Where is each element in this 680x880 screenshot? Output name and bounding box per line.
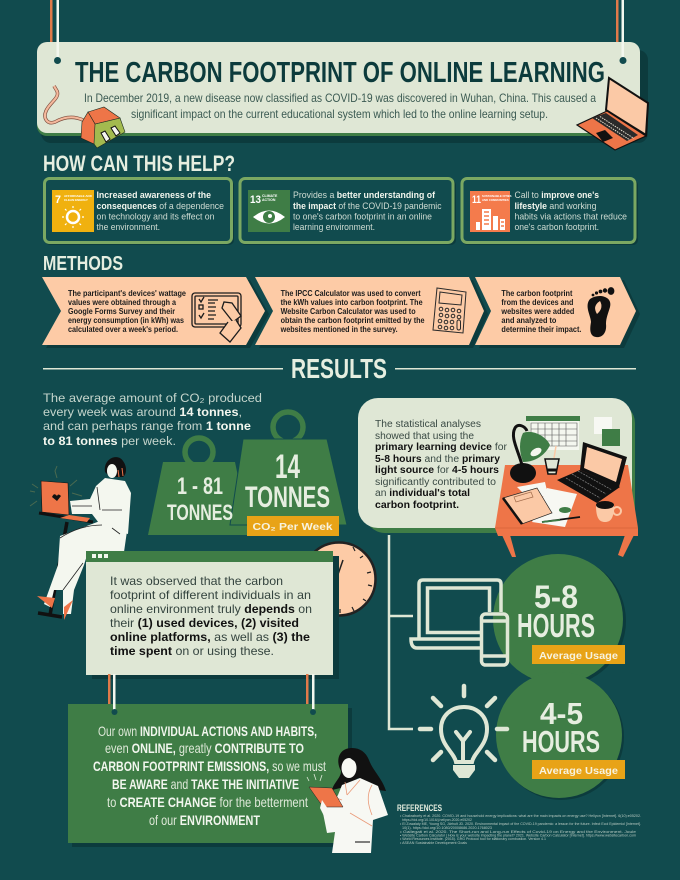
lamp [510,425,550,483]
references: REFERENCES [397,803,442,813]
illustration: person with laptop [30,457,131,620]
reference list: • Chakraborty et al. 2020. COVID-19 and household energy implications: what are the main impacts on energy use? Heliyon [Internet]. 6(10):e05202. [400,814,641,818]
desk top [495,465,638,557]
card 2 text: learning environment. [293,222,375,232]
icon: small weight body [148,438,250,535]
intro text: significant impact on the current educational system which led to the online learning setup. [131,107,548,121]
card 2 text: to one's carbon footprint in an online [293,212,432,222]
reference list: • World Resources Institute. (2015). GHG Protocol tool for stationary combustion. Version 4.1 [400,837,546,841]
icon: SDG 7 [52,190,94,232]
arrow: method step 2 [255,277,488,348]
observation text: footprint of different individuals in an [110,588,311,602]
reference list: • Gallegati et al. 2020. The Short-run and Long-run Effects of Covid-19 on Energy and the Environment. Joule [400,830,636,834]
method 3 text: websites were added [500,307,575,316]
illustration: woman with tablet [307,748,388,853]
card 3 text: lifestyle and working [514,201,596,211]
reference list: • Website Carbon Calculator | How is your website impacting the planet? 2021. Website Carbon Calculator [Internet]. https://www.websitecarbon.com [400,834,636,838]
desk laptop [557,442,627,503]
conclusion text [93,723,326,828]
intro text [84,91,596,121]
label: average usage: Average Usage [539,650,618,662]
text: average CO2: and can perhaps range from 1 tonne [43,419,251,433]
analyses text: significantly contributed to [375,477,497,488]
observation text [110,574,312,658]
heading: methods: METHODS [43,253,123,275]
icon: SDG 7: CLEAN ENERGY [64,198,88,202]
method 2 text: The IPCC Calculator was used to convert [281,289,421,298]
analyses text: showed that using the [375,431,475,442]
reference list: 10(1). https://doi.org/10.1080/20008686.2020.1768023 [402,826,492,830]
illustration: desk [495,416,638,557]
panel: conclusion [68,674,352,847]
intro text: In December 2019, a new disease now classified as COVID-19 was discovered in Wuhan, China. This caused a [84,91,596,105]
icon: plug [45,86,125,148]
card 1 text [96,190,224,232]
connector lines [389,535,413,729]
panel: observation [86,551,339,679]
method 1 text: energy consumption (in kWh) was [68,316,185,325]
method 2 text: obtain the carbon footprint emitted by the [281,316,425,325]
icon: big weight 14 tonnes [230,412,347,536]
mug [596,501,621,522]
card 2 text: Provides a better understanding of [293,190,436,200]
card 1 text: the environment. [96,222,160,232]
icon: SDG 7: AFFORDABLE AND [64,194,93,198]
icon: laptop and phone [411,580,508,665]
method 2 text [280,289,425,334]
observation text: their (1) used devices, (2) visited [110,616,299,630]
icon: checklist [192,293,241,342]
card 3 text: habits via actions that reduce [514,212,627,222]
analyses text: carbon footprint. [375,500,459,511]
circle: 4-5 hours: HOURS [522,724,600,759]
analyses text [375,419,508,511]
method 1 text [68,289,187,334]
conclusion text: CARBON FOOTPRINT EMISSIONS, so we must [93,758,326,774]
arrow: method step 3 [475,277,640,348]
circle: 5-8 hours [493,554,626,686]
icon: big weight 14 tonnes: 14 [275,448,300,486]
small weight label: TONNES [167,500,233,525]
method 3 text: The carbon footprint [501,289,573,298]
arrow: method step 1 [42,277,269,348]
calendar [526,416,580,450]
method 1 text: calculated over a week's period. [68,325,178,334]
circle: 5-8 hours: HOURS [517,607,595,644]
icon: SDG 7: 7 [55,194,61,206]
text: average CO2 [43,391,262,448]
method 2 text: the kWh values into carbon footprint. The [281,298,423,307]
method 2 text: websites mentioned in the survey. [280,325,398,334]
heading: how can this help: HOW CAN THIS HELP? [43,151,235,176]
heading: results: RESULTS [291,353,387,384]
text: average CO2: The average amount of CO₂ produced [43,391,262,405]
observation text: It was observed that the carbon [110,574,283,588]
panel: card 1 [44,178,234,245]
card 3 text [514,190,627,232]
method 1 text: The participant's devices' wattage [68,289,187,298]
icon: footprint [588,287,614,337]
conclusion text: BE AWARE and TAKE THE INITIATIVE [112,776,299,792]
method 3 text: determine their impact. [501,325,581,334]
reference list: • ASEAN Sustainable Development Goals [400,841,467,845]
circle: 5-8 hours: 5-8 [534,579,578,615]
icon: clock [302,542,376,616]
small weight label: 1 - 81 [177,473,223,500]
text: average CO2: every week was around 14 tonnes, [43,405,242,419]
cup [545,446,559,474]
header panel [37,0,648,143]
icon: SDG 13 [248,190,290,232]
method 3 text [500,289,581,334]
icon: SDG 11 [470,191,512,232]
label: CO2 per week: CO₂ Per Week [252,522,333,533]
icon: SDG 13: 13 [250,194,261,206]
method 1 text: values were obtained through a [68,298,177,307]
card 3 text: one's carbon footprint. [514,222,599,232]
card 1 text: Increased awareness of the [96,190,211,200]
text: average CO2: to 81 tonnes per week. [43,434,176,448]
icon: SDG 13: CLIMATE [262,194,278,198]
conclusion text: Our own INDIVIDUAL ACTIONS AND HABITS, [98,723,317,739]
card 2 text [293,190,442,232]
observation text: time spent on or using these. [110,644,274,658]
papers and notebook [503,482,580,527]
conclusion text: of our ENVIRONMENT [149,812,260,828]
analyses text: 5-8 hours and the primary [375,454,501,465]
small weight label [167,473,233,525]
reference list: https://doi.org/10.1016/j.heliyon.2020.e05202 [402,818,472,822]
card 3 text: Call to improve one's [514,190,599,200]
panel: statistical analyses [358,398,635,533]
observation text: online platforms, as well as (3) the [110,630,310,644]
card 2 text: the impact of the COVID-19 pandemic [293,201,442,211]
reference list [400,814,641,845]
analyses text: an individual's total [375,488,470,499]
card 1 text: on technology and its effect on [96,212,214,222]
icon: SDG 13: ACTION [262,198,276,202]
circle: 4-5 hours: 4-5 [540,696,583,731]
panel: card 3 [462,178,638,245]
analyses text: The statistical analyses [375,419,481,430]
method 3 text: from the devices and [501,298,574,307]
analyses text: primary learning device for [375,442,508,453]
method 2 text: Website Carbon Calculator was used to [281,307,416,316]
icon: SDG 11: SUSTAINABLE CITIES [482,194,512,198]
method 1 text: Google Forms Survey and their [68,307,175,316]
circle: 4-5 hours [496,672,625,800]
conclusion text: even ONLINE, greatly CONTRIBUTE TO [105,740,304,756]
icon: SDG 11: 11 [472,194,481,206]
icon: laptop top right [577,78,648,150]
references [397,803,641,845]
panel: card 2 [240,178,456,245]
method 3 text: and analyzed to [501,316,557,325]
icon: light bulb [420,686,507,778]
conclusion text: to CREATE CHANGE for the betterment [107,794,308,810]
icon: calculator [433,288,466,333]
analyses text: light source for 4-5 hours [375,465,500,476]
label: average usage: Average Usage [539,765,618,777]
icon: big weight 14 tonnes: TONNES [245,481,330,514]
reference list: • El Zowalaty ME, Young SG, Järhult JD. 2020. Environmental impact of the COVID-19 pandemic: a lesson for the future. Infect Ecol Epidemiol [Internet]. [400,822,641,826]
icon: SDG 11: AND COMMUNITIES [482,198,509,202]
observation text: online environment truly depends on [110,602,312,616]
card 1 text: consequences of a dependence [96,201,224,211]
sticky notes [594,417,620,446]
